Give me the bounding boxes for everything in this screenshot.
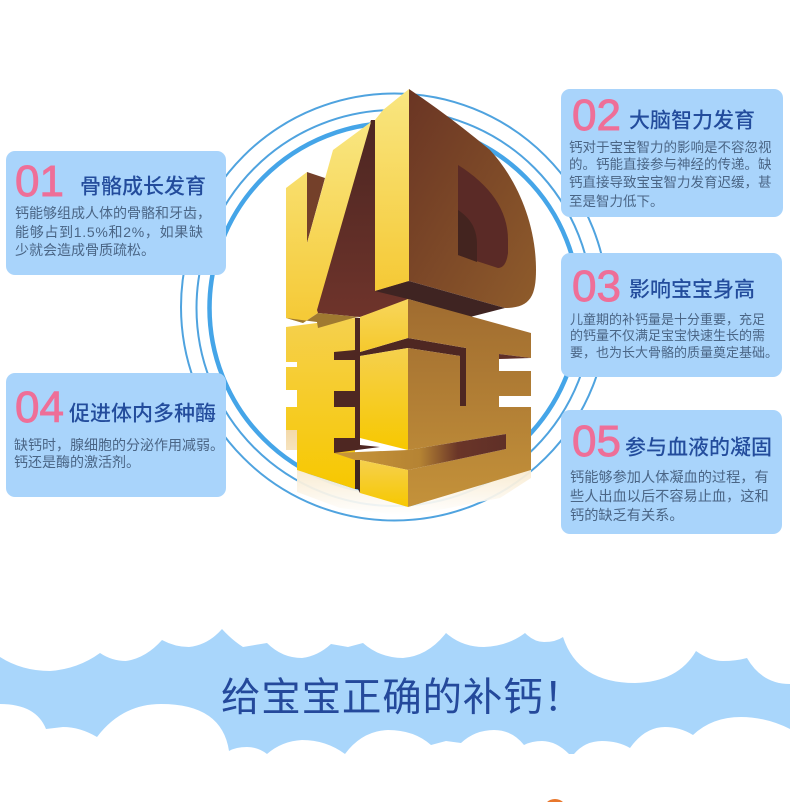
calcium glyph dark strokes [334,318,466,453]
text 03: 儿童期的补钙量是十分重要，充足 [570,312,765,327]
text 04: 钙还是酶的激活剂。 [14,454,140,470]
text 02: 钙对于宝宝智力的影响是不容忽视 [569,139,772,155]
text 03: 要，也为长大骨骼的质量奠定基础。 [570,345,778,360]
heading 02: 大脑智力发育 [629,110,755,132]
letter V dark side [300,120,408,320]
heading 05: 参与血液的凝固 [625,436,772,460]
letter V notch [307,172,325,243]
text 02 [569,139,772,209]
graphic: 3D VD calcium lettering [286,89,536,507]
number 05: 05 [572,417,621,466]
panel: 01 bone growth [6,151,226,275]
text 04 [14,437,224,470]
panel: 05 blood clotting [561,410,782,534]
letter D counter [458,165,508,268]
calcium glyph yellow top face [360,299,408,352]
right dark line [499,354,531,359]
graphic: floor reflection fade [286,430,531,516]
calcium glyph tan right body [408,299,531,507]
lower bar [334,434,506,470]
text 03: 的钙量不仅满足宝宝快速生长的需 [570,328,765,343]
text 05: 钙的缺乏有关系。 [570,508,684,524]
graphic: concentric blue rings [181,94,608,520]
panel: 04 enzymes [6,373,226,497]
banner title: 给宝宝正确的补钙！ [221,676,584,720]
text 01: 钙能够组成人体的骨骼和牙齿， [15,205,211,221]
number 02: 02 [572,91,621,140]
letter V yellow face [286,122,371,323]
heading 03: 影响宝宝身高 [629,278,755,302]
letter D underside [375,281,505,317]
panel: 03 height [561,253,782,377]
lower yellow block [360,460,408,507]
text 01: 能够占到1.5%和2%，如果缺 [15,224,203,240]
letter I yellow face [375,89,409,291]
text 02: 钙直接导致宝宝智力发育迟缓，甚 [569,174,772,190]
calcium glyph lower gap [355,460,360,493]
number 04: 04 [15,383,64,432]
text 03 [570,312,778,360]
panel: 02 brain development [561,89,783,217]
decorative orange circle at page bottom [543,799,567,802]
text 05 [570,469,769,524]
text 01 [15,205,211,258]
letter D brown face [409,89,536,308]
shadow under V [286,313,360,328]
text 04: 缺钙时，腺细胞的分泌作用减弱。 [14,437,224,453]
heading 01: 骨骼成长发育 [80,176,206,198]
number 01: 01 [15,157,64,206]
text 01: 少就会造成骨质疏松。 [15,242,155,258]
heading 04: 促进体内多种酶 [69,402,216,426]
text 05: 些人出血以后不容易止血，这和 [570,488,769,505]
text 05: 钙能够参加人体凝血的过程，有 [570,469,769,486]
text 02: 至是智力低下。 [569,194,664,209]
banner: cloud band [0,629,790,754]
number 03: 03 [572,262,621,311]
calcium glyph yellow centre face [360,348,408,450]
text 02: 的。钙能直接参与神经的传递。缺 [569,156,772,172]
calcium glyph left yellow strokes [286,318,355,489]
